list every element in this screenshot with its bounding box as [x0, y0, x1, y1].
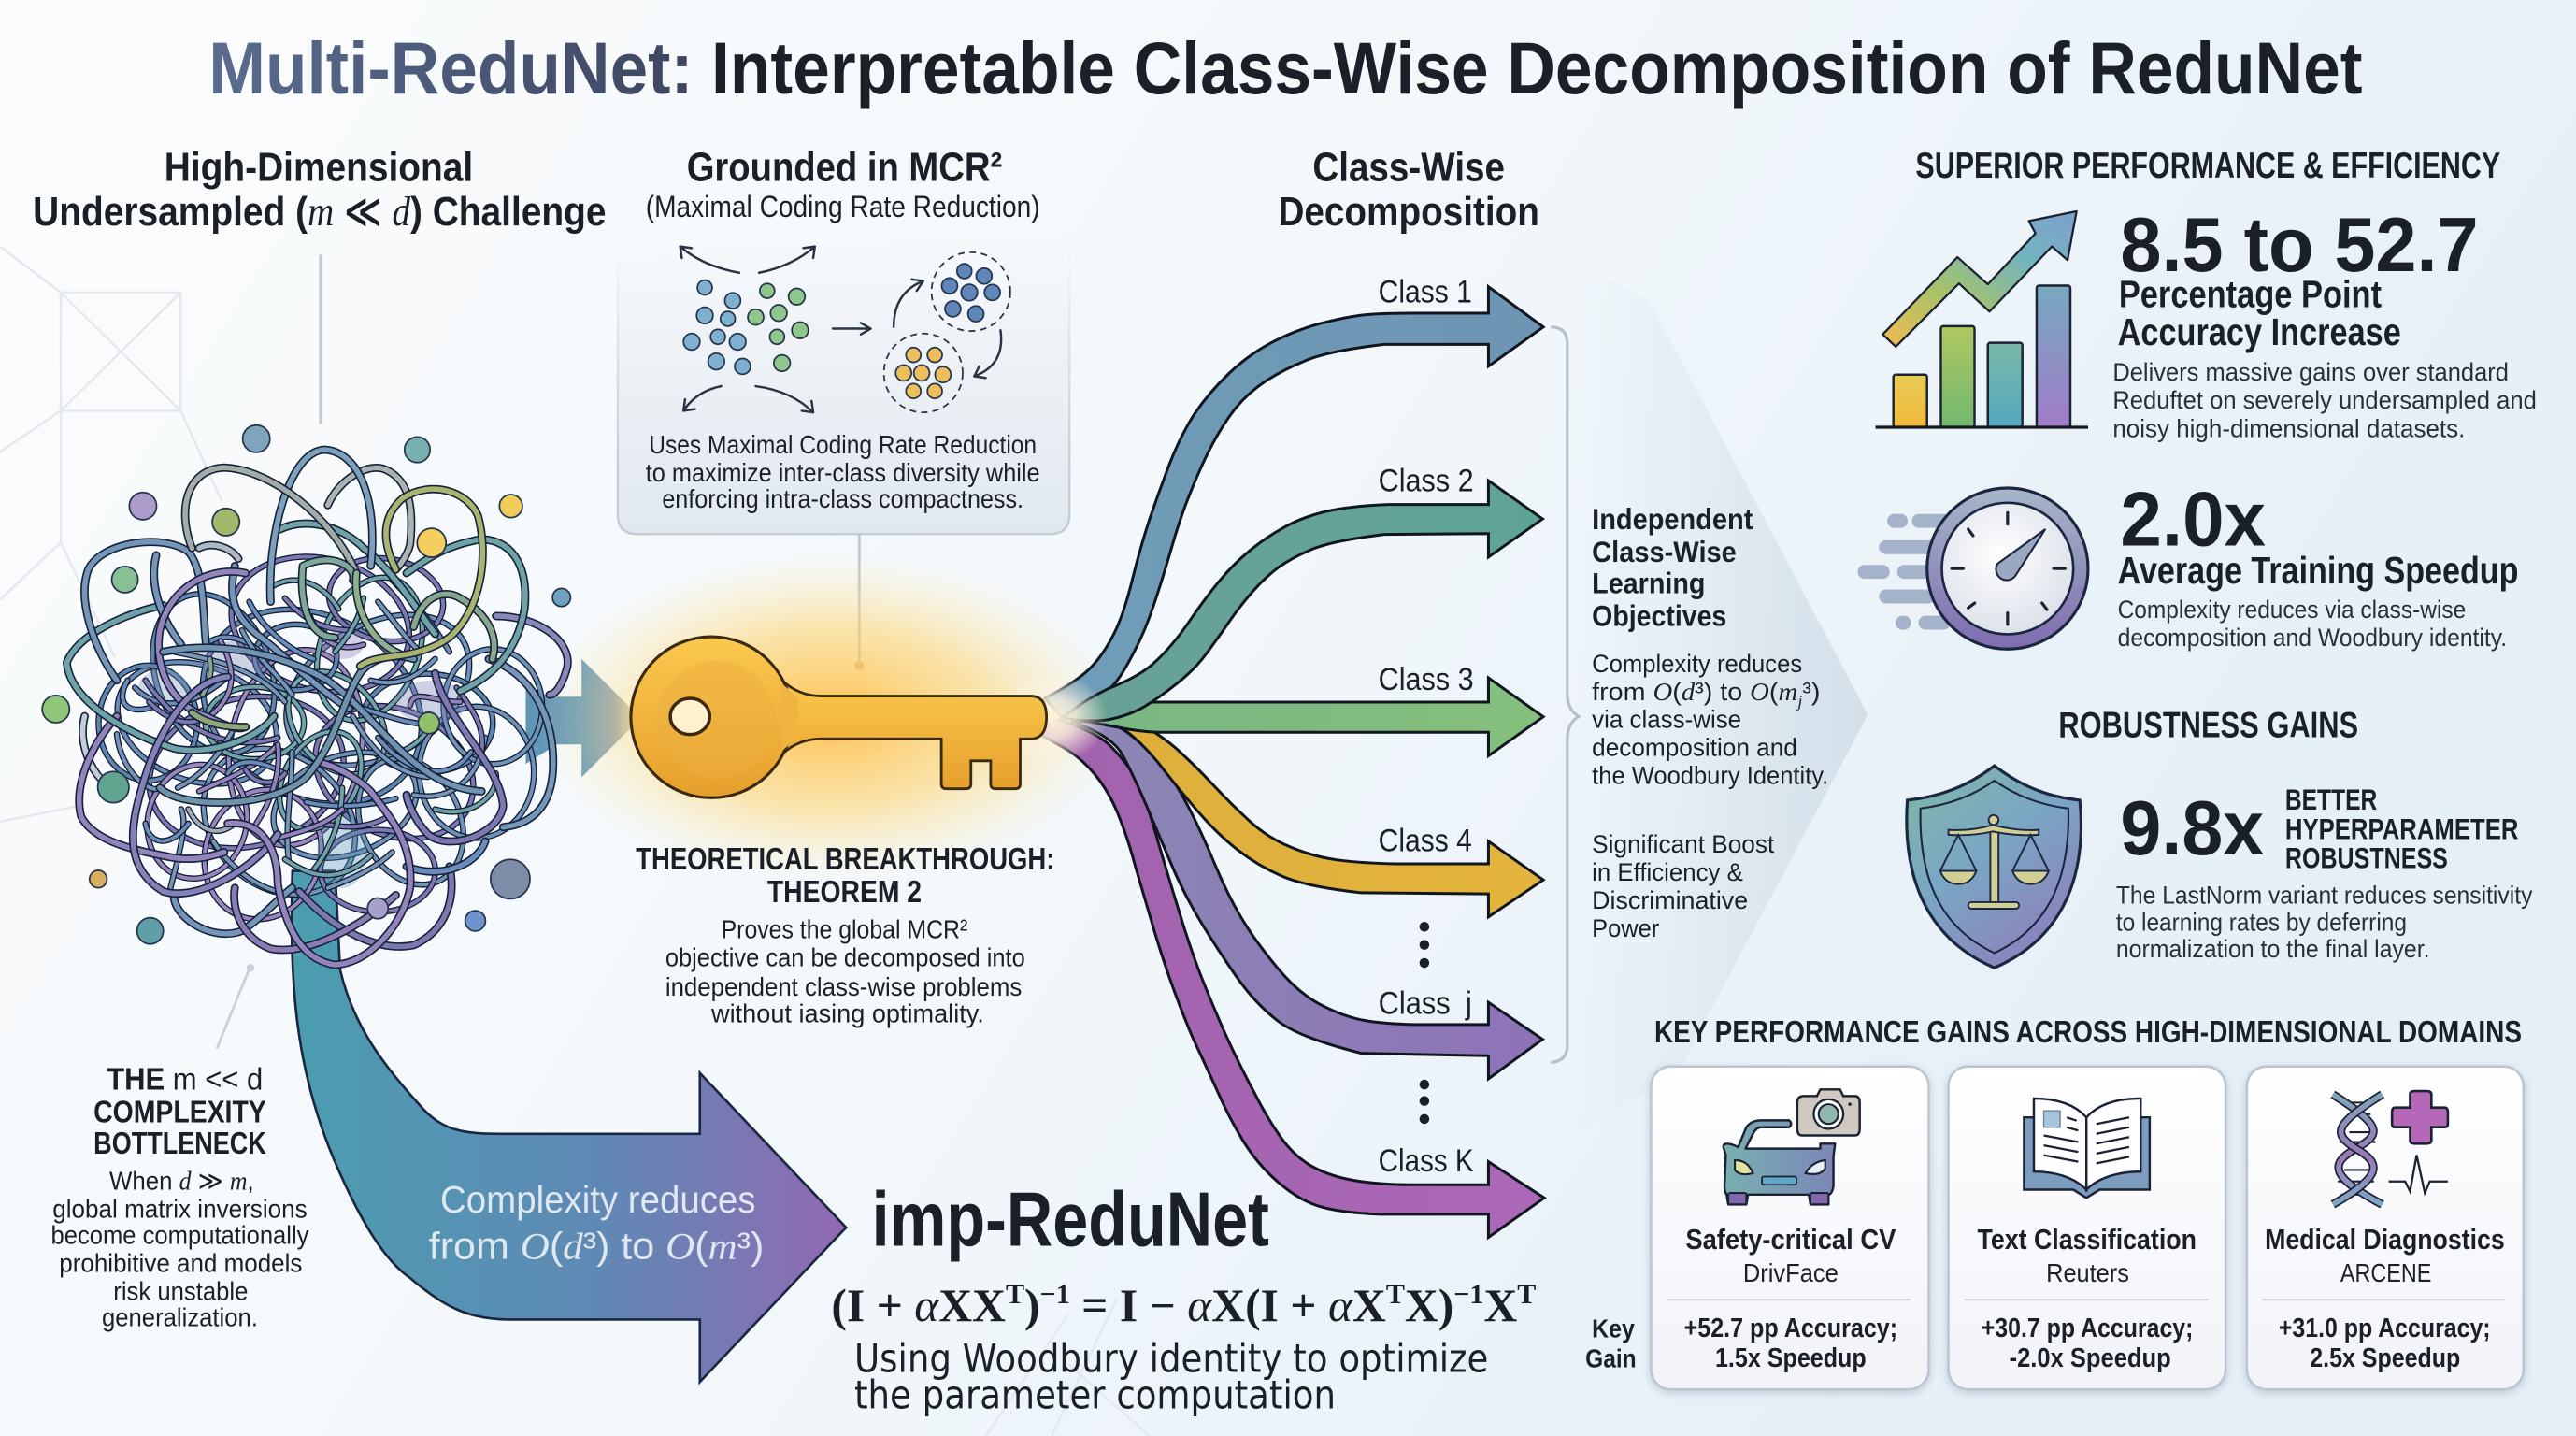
- card text: +30.7 pp Accuracy;: [1982, 1314, 2193, 1343]
- text block: complexity bottleneck: COMPLEXITY: [93, 1095, 266, 1129]
- text block: theoretical breakthrough: THEOREM 2: [767, 875, 922, 910]
- stat: hyperparameter robustness: 9.8x: [2120, 784, 2264, 871]
- diagram: scattered points to class clusters: [680, 247, 1010, 412]
- text block: theoretical breakthrough: [636, 842, 1054, 1027]
- text block: independent class-wise objectives: in Efficiency &: [1592, 857, 1743, 886]
- ellipsis dots: [1420, 922, 1429, 1124]
- heading: robustness gains: ROBUSTNESS GAINS: [2058, 705, 2358, 745]
- class labels: Class 1: [1379, 274, 1472, 309]
- formula: −1: [1453, 1279, 1483, 1310]
- tangle: main looping strands: [66, 450, 567, 965]
- text block: theoretical breakthrough: independent class-wise problems: [665, 972, 1022, 1001]
- text block: independent class-wise objectives: from O(d³) to O(m: [1592, 677, 1796, 706]
- stat: accuracy increase: Delivers massive gains over standard: [2112, 357, 2509, 386]
- text block: complexity bottleneck: generalization.: [102, 1302, 258, 1331]
- formula: (I + αXX: [831, 1280, 1005, 1331]
- text block: theoretical breakthrough: THEORETICAL BREAKTHROUGH:: [636, 842, 1054, 877]
- heading: high-dimensional challenge: [33, 144, 607, 235]
- connector line under challenge heading: [320, 254, 322, 424]
- class labels: Class j: [1379, 985, 1472, 1021]
- connector to bottleneck text: [217, 964, 254, 1048]
- card text: Reuters: [2046, 1258, 2129, 1287]
- heading: class-wise decomposition: Class-Wise: [1312, 144, 1505, 190]
- arrow: class j: [1071, 722, 1542, 1079]
- text block: complexity bottleneck: THE m << d: [107, 1062, 263, 1097]
- panel body text: to maximize inter-class diversity while: [646, 458, 1040, 487]
- text block: theoretical breakthrough: objective can be decomposed into: [665, 942, 1025, 971]
- card text: [1965, 1223, 2208, 1373]
- stat: hyperparameter robustness: normalization to the final layer.: [2116, 934, 2430, 963]
- formula: αX(I + αX: [1187, 1280, 1386, 1331]
- arrow: complexity reduces from tangle: [292, 871, 846, 1382]
- panel border: [618, 247, 1069, 534]
- stat: hyperparameter robustness: BETTER: [2285, 783, 2377, 816]
- key: [631, 637, 1047, 797]
- card: safety-critical CV: [1651, 1067, 1928, 1389]
- stat: training speedup: [2118, 476, 2518, 652]
- heading: class-wise decomposition: Decomposition: [1278, 189, 1539, 235]
- class labels: Class 4: [1379, 823, 1472, 858]
- card text: [1667, 1223, 1911, 1373]
- stat: accuracy increase: Reduftet on severely undersampled and: [2112, 385, 2537, 414]
- formula caption: the parameter computation: [854, 1371, 1336, 1417]
- panel background: [618, 222, 1069, 534]
- card text: +31.0 pp Accuracy;: [2279, 1314, 2491, 1343]
- row label: key gain: [1585, 1314, 1637, 1372]
- text block: independent class-wise objectives: Significant Boost: [1592, 829, 1775, 858]
- formula: = I −: [1070, 1280, 1187, 1331]
- arrow label: [429, 1178, 764, 1267]
- faint geometric network background: [0, 247, 1150, 1436]
- formula: T: [1006, 1279, 1024, 1310]
- tangle: dense inner loops: [98, 538, 542, 936]
- arrow: tangle to key: [525, 659, 640, 777]
- heading: high-dimensional challenge: High-Dimensional: [165, 144, 473, 190]
- stat: training speedup: Complexity reduces via class-wise: [2118, 595, 2466, 624]
- panel body text: enforcing intra-class compactness.: [662, 484, 1023, 513]
- card text: ARCENE: [2340, 1258, 2431, 1287]
- icon: open book: [2024, 1099, 2150, 1198]
- card text: -2.0x Speedup: [2010, 1343, 2171, 1373]
- card text: Text Classification: [1978, 1223, 2197, 1256]
- formula: T: [1517, 1279, 1536, 1310]
- text block: independent class-wise objectives: ³): [1802, 677, 1820, 706]
- text block: imp-ReduNet with Woodbury identity: [831, 1175, 1536, 1417]
- stat: accuracy increase: Accuracy Increase: [2118, 310, 2401, 353]
- text block: independent class-wise objectives: Discriminative: [1592, 885, 1748, 914]
- card text: Safety-critical CV: [1685, 1223, 1896, 1256]
- arrow label: Complexity reduces: [440, 1178, 756, 1221]
- card text: 1.5x Speedup: [1715, 1343, 1867, 1373]
- tangled network: [66, 450, 567, 965]
- arrow: class 3: [1067, 678, 1543, 756]
- formula caption: Using Woodbury identity to optimize: [854, 1336, 1488, 1382]
- tangle: dense inner strands: [117, 581, 496, 892]
- card text: +52.7 pp Accuracy;: [1684, 1314, 1897, 1343]
- formula: −1: [1040, 1279, 1070, 1310]
- heading: grounded in MCR2: (Maximal Coding Rate Reduction): [646, 190, 1040, 223]
- text block: independent class-wise objectives: Complexity reduces: [1592, 649, 1802, 678]
- floating nodes around tangle: [42, 425, 570, 944]
- card text: [2262, 1223, 2505, 1373]
- tangle: colored patches behind strands: [138, 630, 467, 888]
- heading: class-wise decomposition: [1278, 144, 1539, 235]
- text block: independent class-wise objectives: Learning: [1592, 567, 1705, 600]
- class arrows: [1035, 287, 1544, 1238]
- text block: imp-ReduNet with Woodbury identity: imp-ReduNet: [872, 1175, 1269, 1262]
- arrow: class 1: [1045, 287, 1543, 718]
- title: Multi-ReduNet:: [208, 26, 694, 109]
- text block: complexity bottleneck: prohibitive and models: [59, 1248, 302, 1277]
- heading: high-dimensional challenge: Undersampled (m ≪ d) Challenge: [33, 189, 607, 235]
- arrow: class 2: [1062, 481, 1542, 721]
- text block: theoretical breakthrough: Proves the global MCR²: [722, 915, 967, 944]
- arrow: class K: [1035, 720, 1544, 1238]
- stat: hyperparameter robustness: ROBUSTNESS: [2285, 841, 2448, 875]
- bracket: [1551, 327, 1579, 1062]
- text block: complexity bottleneck: global matrix inversions: [52, 1194, 308, 1223]
- card: text classification: [1949, 1067, 2225, 1389]
- text block: independent class-wise objectives: [1592, 502, 1828, 942]
- class labels: Class 2: [1379, 464, 1474, 499]
- card: medical diagnostics: [2247, 1067, 2524, 1389]
- text block: independent class-wise objectives: the Woodbury Identity.: [1592, 760, 1828, 789]
- stat: accuracy increase: 8.5 to 52.7: [2120, 201, 2479, 288]
- stat: training speedup: decomposition and Woodbury identity.: [2118, 623, 2507, 652]
- panel: grounded in MCR2: [618, 144, 1069, 534]
- icon: stopwatch: [1865, 488, 2088, 649]
- stat: accuracy increase: Percentage Point: [2119, 273, 2382, 316]
- text block: independent class-wise objectives: Objectives: [1592, 599, 1726, 633]
- text block: complexity bottleneck: BOTTLENECK: [93, 1127, 266, 1161]
- stat: accuracy increase: [2112, 201, 2537, 443]
- row label: key gain: Key: [1592, 1314, 1635, 1343]
- stat: hyperparameter robustness: to learning rates by deferring: [2116, 908, 2407, 937]
- text block: independent class-wise objectives: Power: [1592, 913, 1659, 942]
- class labels: Class 3: [1379, 662, 1474, 697]
- text block: independent class-wise objectives: j: [1796, 692, 1802, 711]
- title: Interpretable Class-Wise Decomposition of ReduNet: [711, 26, 2362, 109]
- class labels: Class K: [1379, 1143, 1474, 1179]
- stat: hyperparameter robustness: [2116, 783, 2533, 963]
- arrow label: from O(d³) to O(m³): [429, 1224, 764, 1267]
- icon: DNA, medical cross and heartbeat: [2333, 1091, 2448, 1204]
- class labels: [1379, 274, 1474, 1179]
- stat: training speedup: 2.0x: [2120, 476, 2266, 563]
- row label: key gain: Gain: [1585, 1343, 1637, 1372]
- text block: independent class-wise objectives: decomposition and: [1592, 733, 1797, 762]
- connector from panel to key: [854, 534, 864, 670]
- fan origin fade: [995, 672, 1108, 764]
- text block: complexity bottleneck: When d ≫ m,: [109, 1167, 254, 1197]
- text block: theoretical breakthrough: without iasing optimality.: [710, 998, 984, 1027]
- arrow: class 4: [1084, 718, 1543, 917]
- stat: hyperparameter robustness: The LastNorm variant reduces sensitivity: [2116, 881, 2533, 910]
- stat: accuracy increase: noisy high-dimensional datasets.: [2112, 414, 2465, 443]
- formula: T: [1386, 1279, 1405, 1310]
- stat: hyperparameter robustness: HYPERPARAMETER: [2285, 811, 2519, 845]
- text block: complexity bottleneck: become computationally: [50, 1221, 308, 1250]
- icon: car with camera: [1724, 1089, 1860, 1204]
- card text: Medical Diagnostics: [2265, 1223, 2505, 1256]
- panel body text: Uses Maximal Coding Rate Reduction: [649, 430, 1037, 459]
- card text: 2.5x Speedup: [2310, 1343, 2460, 1373]
- key glow: [537, 553, 1122, 883]
- background chevron: class-wise summary: [1577, 263, 1868, 1134]
- formula: ): [1024, 1280, 1040, 1331]
- icon: rising bar chart: [1876, 211, 2088, 427]
- text block: independent class-wise objectives: via class-wise: [1592, 705, 1741, 734]
- heading: grounded in MCR2: Grounded in MCR²: [687, 144, 1002, 190]
- text block: complexity bottleneck: risk unstable: [113, 1276, 248, 1305]
- icon: shield with scales: [1907, 766, 2081, 968]
- text block: independent class-wise objectives: Independent: [1592, 502, 1753, 536]
- formula caption: [854, 1336, 1488, 1417]
- text block: independent class-wise objectives: Class-Wise: [1592, 535, 1737, 568]
- heading: grounded in MCR2: [646, 144, 1040, 223]
- formula: X): [1405, 1280, 1453, 1331]
- text block: complexity bottleneck: [50, 1062, 308, 1331]
- formula: X: [1483, 1280, 1517, 1331]
- card text: DrivFace: [1743, 1258, 1839, 1287]
- panel body text: [646, 430, 1040, 513]
